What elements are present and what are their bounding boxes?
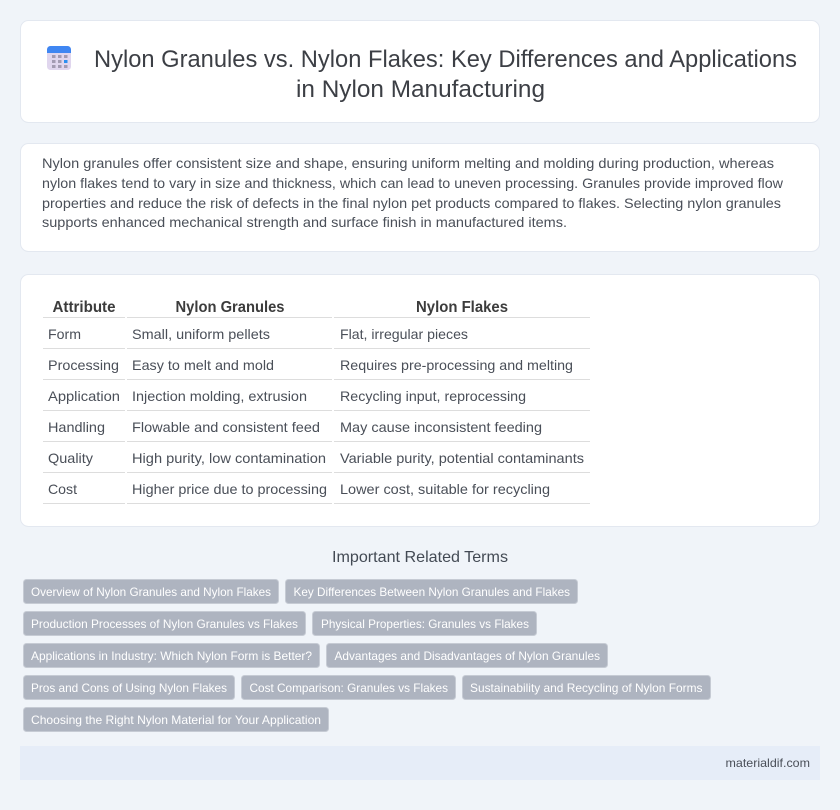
tag: Overview of Nylon Granules and Nylon Flakes xyxy=(31,585,271,599)
panel: header xyxy=(20,20,820,122)
table row: handling xyxy=(43,419,590,442)
tag: Choosing the Right Nylon Material for Your Application xyxy=(31,713,321,727)
tag: Pros and Cons of Using Nylon Flakes xyxy=(31,681,227,695)
tag group: related terms xyxy=(24,580,710,732)
table row: processing: Processing xyxy=(48,357,119,373)
tag xyxy=(286,580,578,604)
tag xyxy=(312,612,536,636)
tag xyxy=(24,612,306,636)
table row: application: Recycling input, reprocessing xyxy=(340,388,526,404)
tag xyxy=(24,708,328,732)
title: Nylon Granules vs. Nylon Flakes: Key Differences and Applications xyxy=(94,46,797,73)
tag xyxy=(24,644,320,668)
table row: form: Flat, irregular pieces xyxy=(340,326,468,342)
table header: Attribute xyxy=(52,299,116,316)
table row: handling: May cause inconsistent feeding xyxy=(340,419,542,435)
text block: description: nylon flakes tend to vary in size and thickness, which can lead to uneven processing. Granules provide improved flow xyxy=(42,175,784,191)
tag: Key Differences Between Nylon Granules and Flakes xyxy=(294,585,570,599)
tag xyxy=(462,676,710,700)
table header: Nylon Granules xyxy=(176,299,285,316)
table row: processing xyxy=(43,357,590,380)
table row: handling: Handling xyxy=(48,419,105,435)
table row: processing: Requires pre-processing and melting xyxy=(340,357,573,373)
tag: Advantages and Disadvantages of Nylon Granules xyxy=(334,649,600,663)
footer: materialdif.com xyxy=(726,756,810,770)
heading: important related terms: Important Related Terms xyxy=(332,549,508,566)
text block: description: Nylon granules offer consistent size and shape, ensuring uniform melting and molding during production, whereas xyxy=(42,155,774,171)
icon: calendar xyxy=(47,46,71,70)
table row: cost xyxy=(43,481,590,504)
table header xyxy=(43,299,590,318)
tag xyxy=(24,580,278,604)
title: in Nylon Manufacturing xyxy=(296,76,545,103)
text block: description xyxy=(42,155,784,230)
tag: Cost Comparison: Granules vs Flakes xyxy=(250,681,448,695)
table row: form: Form xyxy=(48,326,81,342)
text block: description: supports enhanced mechanical strength and surface finish in manufactured items. xyxy=(42,214,567,230)
table row: form xyxy=(43,326,590,349)
table header: Nylon Flakes xyxy=(416,299,508,316)
tag: Applications in Industry: Which Nylon Form is Better? xyxy=(31,649,312,663)
table row: quality: Variable purity, potential contaminants xyxy=(340,450,584,466)
table row: cost: Cost xyxy=(48,481,77,497)
tag: Physical Properties: Granules vs Flakes xyxy=(321,617,529,631)
table row: application: Application xyxy=(48,388,120,404)
tag xyxy=(326,644,608,668)
table row: form: Small, uniform pellets xyxy=(132,326,270,342)
table row: processing: Easy to melt and mold xyxy=(132,357,274,373)
tag: Production Processes of Nylon Granules vs Flakes xyxy=(31,617,298,631)
tag: Sustainability and Recycling of Nylon Forms xyxy=(470,681,702,695)
table row: quality: High purity, low contamination xyxy=(132,450,326,466)
text block: description: properties and reduce the risk of defects in the final nylon pet products compared to flakes. Selecting nylon granules xyxy=(42,195,781,211)
tag xyxy=(24,676,234,700)
panel: description xyxy=(20,144,820,252)
table row: quality xyxy=(43,450,590,473)
table row: quality: Quality xyxy=(48,450,93,466)
panel: comparison table xyxy=(20,274,820,526)
table row: cost: Higher price due to processing xyxy=(132,481,327,497)
table row: application: Injection molding, extrusion xyxy=(132,388,307,404)
table row: application xyxy=(43,388,590,411)
table row: handling: Flowable and consistent feed xyxy=(132,419,320,435)
title xyxy=(94,46,797,103)
tag xyxy=(242,676,456,700)
table row: cost: Lower cost, suitable for recycling xyxy=(340,481,550,497)
footer xyxy=(20,746,820,780)
